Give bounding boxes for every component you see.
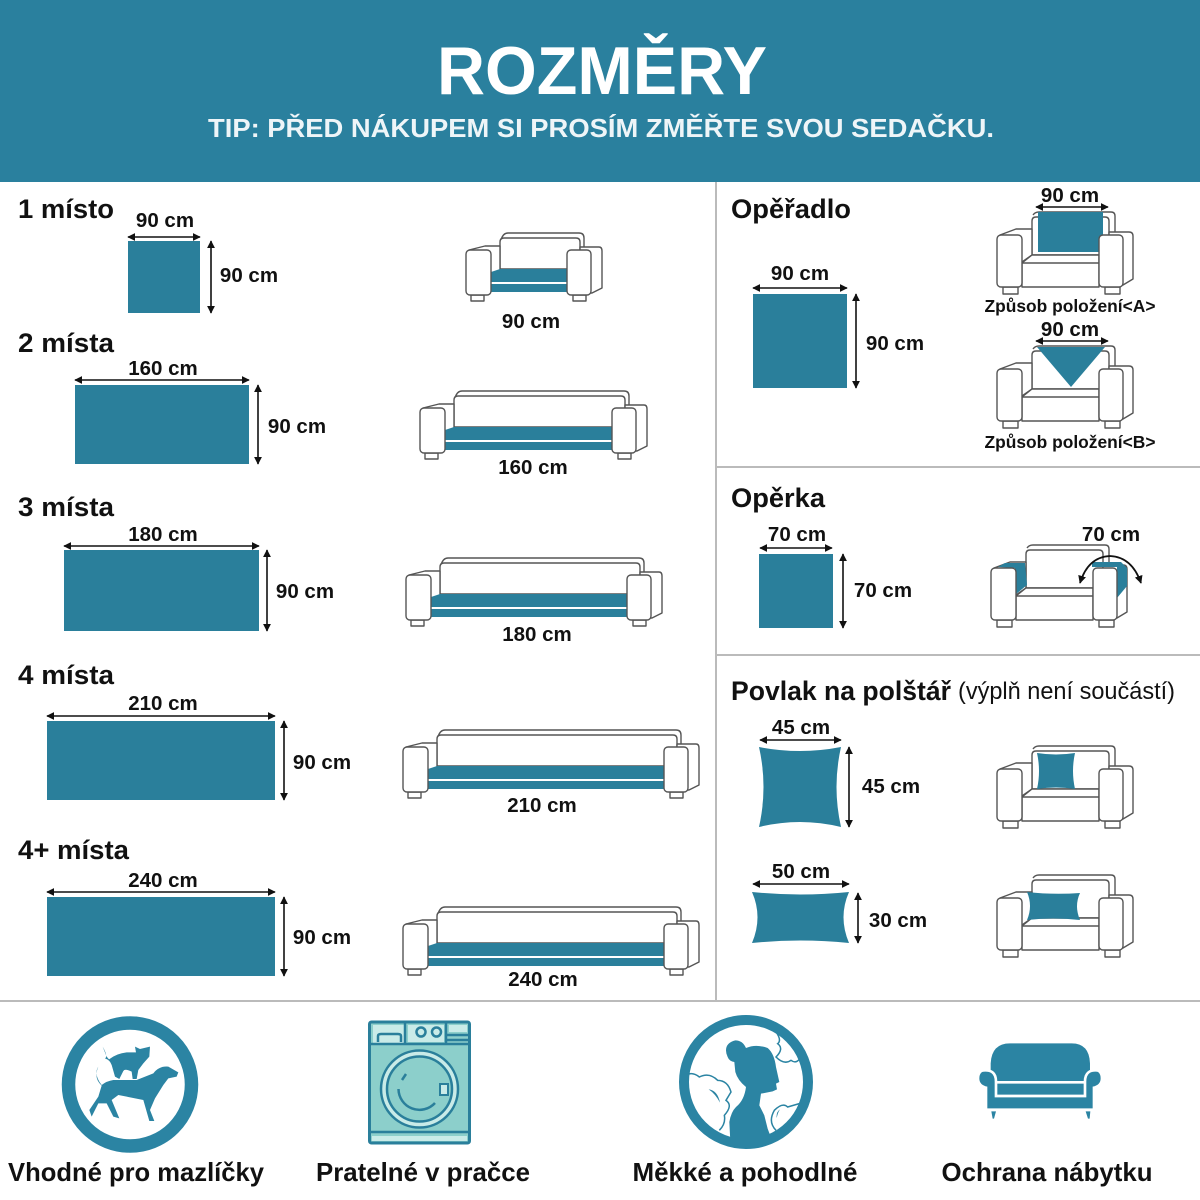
armchair with placement B (997, 346, 1133, 428)
sofa diagram (403, 907, 699, 975)
feature: machine washable (316, 1022, 530, 1187)
heading: 2 místa (18, 328, 115, 358)
heading: 4 místa (18, 660, 115, 690)
curved arrow (1080, 556, 1141, 583)
armchair with rectangular pillow (997, 875, 1133, 957)
height label: 90 cm (268, 415, 326, 438)
panel: 1 místo (18, 194, 602, 333)
height arrow (842, 554, 844, 628)
width arrow (75, 379, 249, 381)
width label: 90 cm (136, 209, 194, 232)
panel: Opěradlo (731, 184, 1156, 452)
fabric size rectangle (47, 897, 275, 976)
caption: Měkké a pohodlné (632, 1157, 858, 1187)
sofa width label: 240 cm (508, 968, 578, 991)
width label: 210 cm (128, 692, 198, 715)
heading: Povlak na polštář (731, 676, 951, 706)
fabric size rectangle (47, 721, 275, 800)
pillow height arrow (848, 747, 850, 827)
height label: 90 cm (293, 751, 351, 774)
fabric size rectangle (64, 550, 259, 631)
chair B caption: Způsob položení<B> (984, 432, 1156, 452)
panel: Povlak na polštář (731, 676, 1175, 957)
width label: 90 cm (771, 262, 829, 285)
pillow height label: 45 cm (862, 775, 920, 798)
pillow width arrow (760, 739, 841, 741)
sofa diagram (420, 391, 647, 459)
heading: 1 místo (18, 194, 114, 224)
width arrow (64, 545, 259, 547)
chair A width label: 90 cm (1041, 184, 1099, 207)
armchair with square pillow (997, 746, 1133, 828)
height label: 90 cm (293, 926, 351, 949)
width label: 160 cm (128, 357, 198, 380)
feature: furniture protection (942, 1043, 1152, 1187)
panel: 4 místa (18, 660, 699, 817)
width arrow (760, 547, 832, 549)
square pillow (759, 747, 841, 827)
height arrow (283, 721, 285, 800)
heading: 3 místa (18, 492, 115, 522)
rectangular pillow height arrow (857, 893, 859, 943)
chair A width arrow (1036, 206, 1108, 208)
icon: woman silhouette with clouds (684, 1020, 808, 1148)
heading: Opěrka (731, 483, 826, 513)
width label: 240 cm (128, 869, 198, 892)
sofa diagram (466, 233, 602, 301)
sofa width label: 160 cm (498, 456, 568, 479)
feature: pet friendly (8, 1023, 265, 1187)
sofa width label: 210 cm (507, 794, 577, 817)
heading: 4+ místa (18, 835, 130, 865)
panel: 2 místa (18, 328, 647, 479)
rectangular pillow (752, 892, 849, 943)
fabric size square (753, 294, 847, 388)
heading: Opěřadlo (731, 194, 851, 224)
fabric size rectangle (75, 385, 249, 464)
rectangular pillow width arrow (753, 883, 849, 885)
sofa width label: 90 cm (502, 310, 560, 333)
icon: sofa silhouette (979, 1043, 1101, 1119)
header banner (0, 0, 1200, 182)
height arrow (266, 550, 268, 631)
sofa diagram (406, 558, 662, 626)
pillow width label: 45 cm (772, 716, 830, 739)
title: ROZMĚRY (437, 32, 767, 109)
height label: 70 cm (854, 579, 912, 602)
width label: 180 cm (128, 523, 198, 546)
rectangular pillow width label: 50 cm (772, 860, 830, 883)
width arrow (753, 287, 847, 289)
panel: 3 místa (18, 492, 662, 646)
width arrow (47, 715, 275, 717)
height label: 90 cm (276, 580, 334, 603)
icon: cat and dog in ring (68, 1023, 192, 1146)
chair B width label: 90 cm (1041, 318, 1099, 341)
height arrow (210, 241, 212, 313)
rectangular pillow height label: 30 cm (869, 909, 927, 932)
caption: Pratelné v pračce (316, 1157, 530, 1187)
sofa width label: 180 cm (502, 623, 572, 646)
armchair with placement A (997, 212, 1133, 294)
height arrow (257, 385, 259, 464)
height arrow (283, 897, 285, 976)
height label: 90 cm (866, 332, 924, 355)
fabric size square (759, 554, 833, 628)
chair B width arrow (1036, 340, 1108, 342)
fabric size square (128, 241, 200, 313)
heading note: (výplň není součástí) (958, 678, 1175, 705)
armrest width label: 70 cm (1082, 523, 1140, 546)
caption: Ochrana nábytku (942, 1157, 1152, 1187)
subtitle tip: TIP: PŘED NÁKUPEM SI PROSÍM ZMĚŘTE SVOU SEDAČKU. (208, 113, 994, 143)
icon: washing machine (370, 1022, 470, 1143)
caption: Vhodné pro mazlíčky (8, 1157, 265, 1187)
panel: 4+ místa (18, 835, 699, 991)
height arrow (855, 294, 857, 388)
sofa diagram (403, 730, 699, 798)
width label: 70 cm (768, 523, 826, 546)
chair A caption: Způsob položení<A> (984, 296, 1156, 316)
width arrow (128, 236, 200, 238)
width arrow (47, 891, 275, 893)
height label: 90 cm (220, 264, 278, 287)
panel: Opěrka (731, 483, 1141, 628)
feature: soft and comfortable (632, 1020, 858, 1187)
armchair with armrest covers (991, 545, 1127, 627)
